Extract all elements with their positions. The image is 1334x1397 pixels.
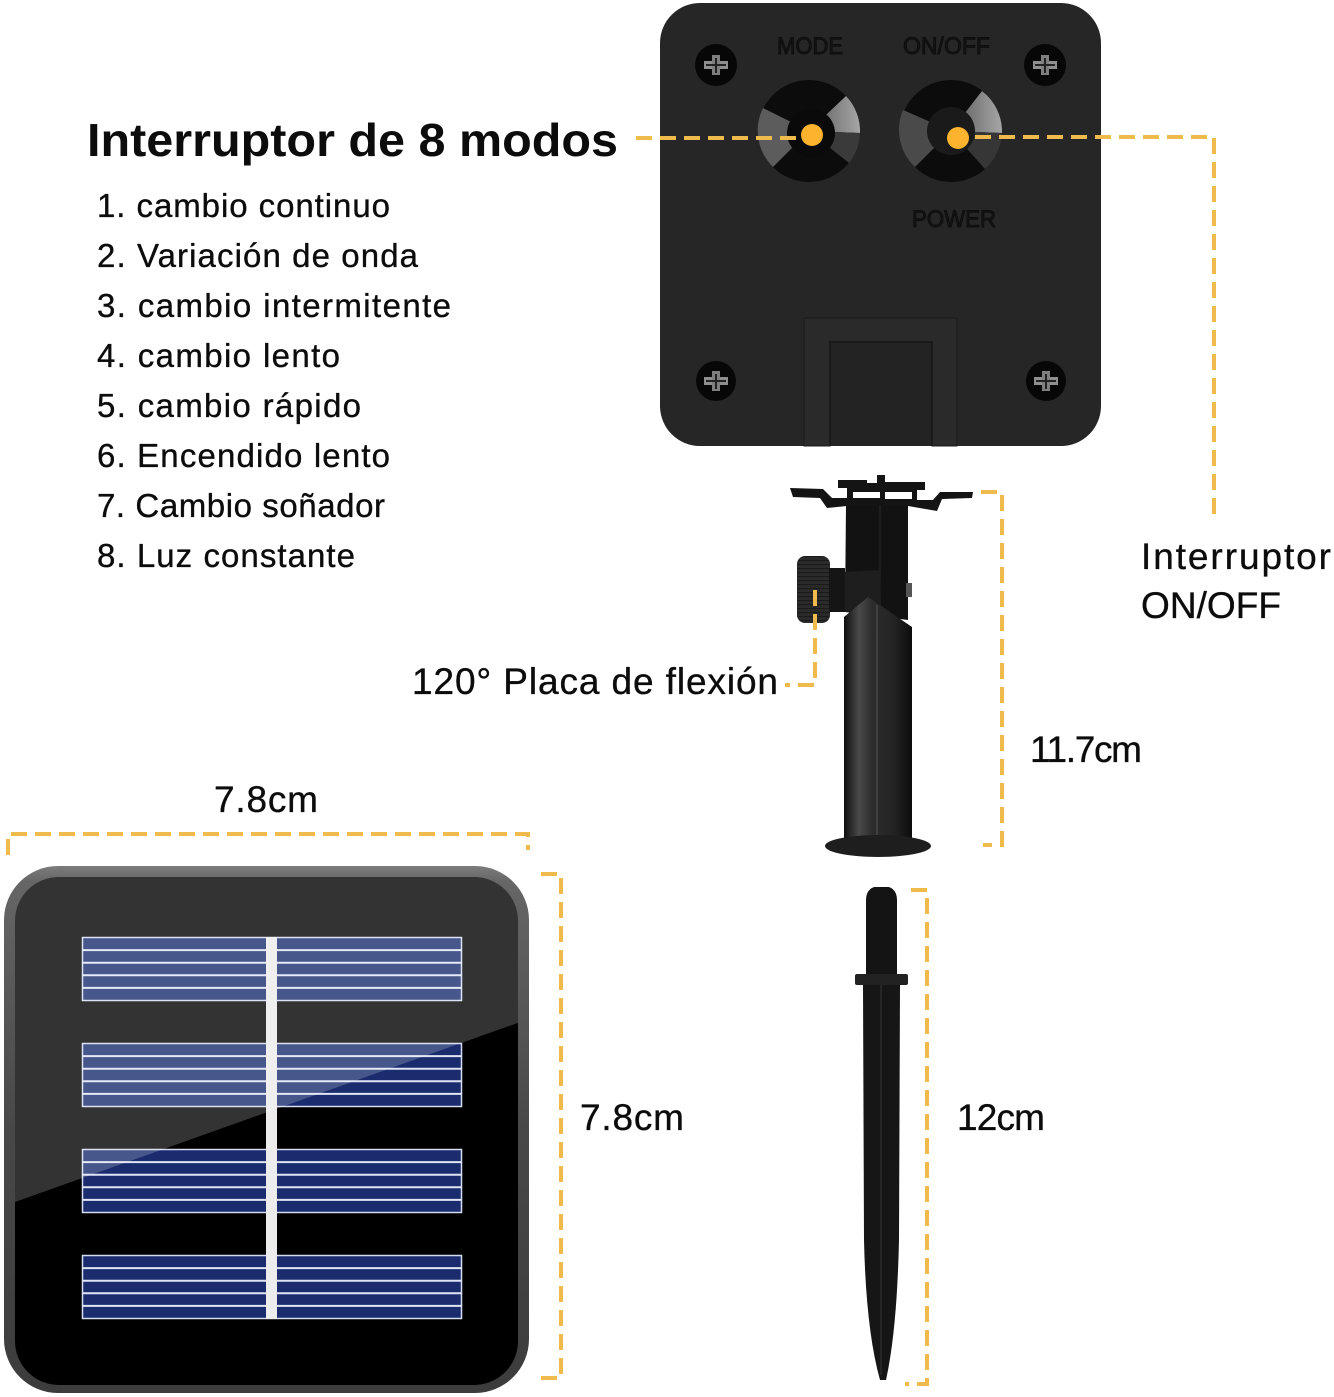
- dimension bracket: 11.7cm: [981, 492, 1002, 845]
- panel: back plate of the solar box: [660, 3, 1101, 446]
- list item 1: 1. cambio continuo: [97, 187, 390, 224]
- bracket neck: [845, 505, 908, 620]
- embossed label MODE: MODE: [777, 33, 843, 60]
- panel frame: [4, 866, 529, 1393]
- glass reflection: [15, 877, 518, 1202]
- label: panel height 7.8cm: 7.8cm: [580, 1097, 684, 1138]
- tube seam: [876, 605, 878, 838]
- callout dot: mode button: [801, 124, 823, 146]
- adjusting knob: [797, 556, 845, 623]
- base flange: [825, 835, 931, 857]
- solar cell row 1: [82, 938, 462, 1000]
- dimension bracket: panel width: [8, 834, 528, 855]
- panel: solar panel: [0, 866, 540, 1393]
- support tube: [844, 597, 912, 840]
- icon: screw top right: [1024, 44, 1066, 86]
- solar cell row 4: [82, 1256, 462, 1318]
- mounting clip: [804, 318, 957, 446]
- bracket hinge: [843, 570, 881, 612]
- list item 2: 2. Variación de onda: [97, 237, 419, 274]
- panel glass: [15, 877, 518, 1385]
- list item 8: 8. Luz constante: [97, 537, 355, 574]
- solar cell row 3: [82, 1150, 462, 1212]
- icon: screw bottom left: [696, 361, 736, 401]
- solar cell row 2: [82, 1044, 462, 1106]
- label: bending plate: 120° Placa de flexión: [412, 661, 778, 702]
- dimension bracket: 12cm: [905, 890, 927, 1384]
- callout dot: on/off button: [947, 127, 969, 149]
- callout line: on/off switch: [975, 137, 1214, 518]
- embossed label ON/OFF: ON/OFF: [903, 33, 990, 60]
- center strip: [266, 937, 277, 1319]
- list item 5: 5. cambio rápido: [97, 387, 361, 424]
- bracket top plate: [790, 475, 973, 511]
- list item 7: 7. Cambio soñador: [97, 487, 385, 524]
- list item 3: 3. cambio intermitente: [97, 287, 451, 324]
- screw tip: [906, 583, 912, 597]
- ground stake: [855, 887, 908, 1380]
- icon: screw top left: [695, 44, 737, 86]
- mode list: [97, 187, 451, 574]
- list item 4: 4. cambio lento: [97, 337, 340, 374]
- label: panel width 7.8cm: 7.8cm: [214, 779, 318, 820]
- label: on/off switch: Interruptor: [1141, 536, 1331, 577]
- stake body: [863, 985, 900, 1380]
- mode button: [758, 80, 860, 182]
- heading: 8-mode switch: Interruptor de 8 modos: [87, 114, 618, 166]
- neck seam: [879, 505, 881, 608]
- stake collar: [855, 974, 908, 985]
- embossed label POWER: POWER: [912, 206, 996, 233]
- label: on/off switch: ON/OFF: [1141, 585, 1281, 626]
- dimension bracket: panel height: [538, 874, 561, 1378]
- label: 12cm: 12cm: [957, 1097, 1045, 1138]
- icon: screw bottom right: [1026, 361, 1066, 401]
- stake head: [866, 887, 897, 975]
- list item 6: 6. Encendido lento: [97, 437, 390, 474]
- label: on/off switch: [1141, 536, 1331, 626]
- callout line: bending plate: [785, 590, 815, 685]
- on/off button: [899, 80, 1002, 182]
- callout line: mode switch: [636, 136, 800, 140]
- mounting bracket: [790, 475, 973, 857]
- bracket windows: [853, 492, 912, 499]
- label: 11.7cm: 11.7cm: [1030, 729, 1142, 770]
